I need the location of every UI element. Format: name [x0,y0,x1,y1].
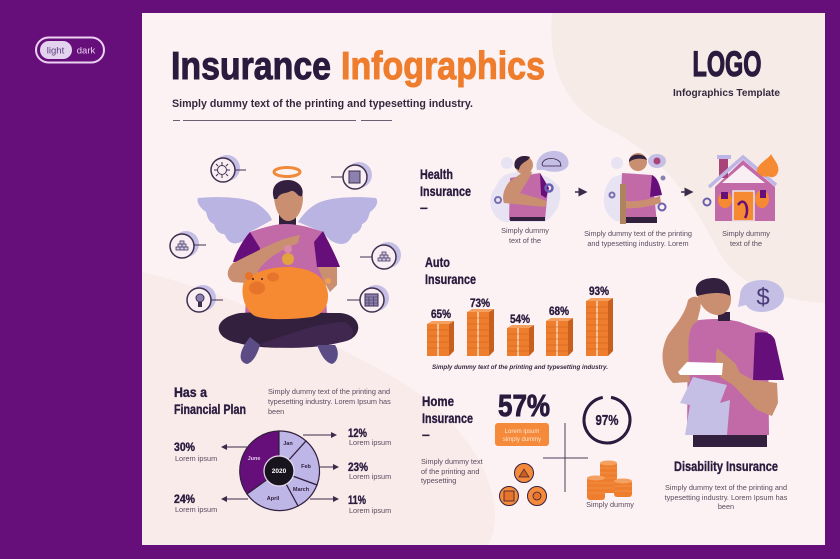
text: financial plan description: typesetting industry. Lorem Ipsum has [268,397,391,406]
sleeve [753,332,784,380]
pie chart: June [248,456,260,462]
pie chart [240,431,320,511]
ring: 97% [580,393,634,447]
left arm [228,235,300,283]
title [171,45,545,88]
stat: 12%: 12% [348,426,367,440]
text: financial plan description: been [268,407,284,416]
icon ring: sun [211,155,246,182]
cross divider [543,423,588,492]
text: health caption one: text of the [509,236,541,245]
logo caption: Infographics Template [673,87,780,99]
piggy [242,267,328,319]
stat: 24% [174,492,217,514]
text: disability description: Simply dummy text of the printing and [665,483,787,492]
stat: 57%: 57% [498,388,550,423]
bar: 68% [546,304,573,356]
icon ring: bulb [187,285,223,312]
text: disability description: typesetting industry. Lorem Ipsum has [665,493,788,502]
pie chart: April [267,496,280,502]
torso [245,224,327,316]
subtitle: Simply dummy text of the printing and typesetting industry. [172,98,473,110]
arrows: pie callouts [222,435,338,499]
pie chart: Jan [283,441,293,447]
bar: 73%: 73% [470,296,490,310]
pants [693,435,767,447]
text: health caption two: and typesetting industry. Lorem [587,239,689,248]
ring: 97%: 97% [596,412,618,429]
text: coin caption: Simply dummy [586,500,634,509]
stat: 12%: Lorem ipsum [349,438,391,447]
text: home description: of the printing and [421,467,479,476]
icon ring: safe [331,162,372,189]
heading: auto insurance: Insurance [425,271,476,287]
heading: health insurance: Health [420,166,453,182]
stat: 24%: Lorem ipsum [175,505,217,514]
left wing [197,197,272,243]
pie chart: 2020 [272,468,287,475]
toggle: light dark: dark [77,46,95,56]
heading: financial plan: Has a [174,384,207,400]
raised arm [663,297,701,383]
text: financial plan description [268,387,391,416]
illustration: angel with piggy bank [197,168,377,364]
text: disability description [665,483,788,511]
stat: 30%: 30% [174,440,195,454]
logo: LOGO [692,45,762,84]
stat: 11%: Lorem ipsum [349,506,391,515]
bar: 54%: 54% [510,312,530,326]
heading: health insurance: Insurance [420,183,471,199]
heading: health insurance [420,166,471,215]
chart: money stack bars [427,284,613,356]
icon ring: calendar [347,285,389,312]
callout: orange label: Lorem ipsum [505,429,539,435]
halo [274,168,300,176]
text: health caption three: text of the [730,239,762,248]
stat: 11% [348,493,391,515]
text: home description [421,457,483,485]
title: Infographics [341,45,545,88]
torso [687,319,769,435]
heading: home insurance [422,393,473,442]
toggle: light dark: light [47,46,65,56]
heading: health insurance: – [420,199,428,215]
text: home description: Simply dummy text [421,457,483,466]
icon ring: gold right [360,242,401,269]
text: health caption one [501,226,549,245]
heading: auto insurance [425,254,476,287]
text: auto caption: Simply dummy text of the printing and typesetting industry. [432,364,608,371]
heading: auto insurance: Auto [425,254,450,270]
icon: coin stacks [587,460,632,500]
feet [241,337,260,364]
icon ring: gold left [170,231,206,258]
text: health caption two [584,229,692,248]
subtitle rule [173,120,392,122]
bar: 54% [507,312,534,356]
legs [219,312,358,348]
paper white [678,362,723,375]
thought bubble [738,280,784,312]
stat: 12% [348,426,391,447]
arrow: health one [575,191,586,193]
heading: home insurance: Home [422,393,454,409]
neck and head [279,212,296,230]
forearm and hand [716,348,778,416]
toggle: light dark [36,38,104,62]
callout: orange label: simply dummy [503,437,541,443]
coin [282,253,294,265]
right arm [318,267,337,292]
stat: 23%: 23% [348,460,368,474]
heading: disability insurance: Disability Insurance [674,458,778,474]
heading: home insurance: – [422,426,430,442]
text: health caption one: Simply dummy [501,226,549,235]
bar: 73% [467,296,494,356]
pie chart: March [293,487,310,493]
bar: 65%: 65% [431,307,451,321]
stat: 30% [174,440,217,463]
stat: 23% [348,460,391,481]
pie chart: Feb [301,464,312,470]
stat: 11%: 11% [348,493,366,507]
sleeves [233,231,340,267]
text: health caption three [722,229,770,248]
neck [718,312,730,321]
right wing [298,197,377,244]
callout: orange label [495,423,549,446]
title: Insurance [171,45,331,88]
stat: 24%: 24% [174,492,195,506]
icon: safe badge [500,486,518,506]
illustration: burning house [704,154,778,221]
bar: 65% [427,307,454,356]
bar: 68%: 68% [549,304,569,318]
text: home description: typesetting [421,476,456,485]
illustration: worried person [490,151,568,222]
arrow: health two [681,191,692,193]
bar: 93% [586,284,613,356]
paper lavender [680,377,730,435]
text: health caption two: Simply dummy text of the printing [584,229,692,238]
stat: 30%: Lorem ipsum [175,454,217,463]
heading: financial plan line two: Financial Plan [174,401,246,417]
illustration: person from behind [604,153,666,224]
panel: sheet [142,13,825,545]
stat: 23%: Lorem ipsum [349,472,391,481]
text: health caption three: Simply dummy [722,229,770,238]
illustration: disability person: $ [756,284,770,311]
text: disability description: been [718,502,734,511]
text: financial plan description: Simply dummy text of the printing and [268,387,390,396]
illustration: disability person [663,278,784,447]
head [697,283,731,315]
bar: 93%: 93% [589,284,609,298]
icon: gold badge [514,464,534,482]
icon: coin badge [528,486,546,506]
heading: home insurance: Insurance [422,410,473,426]
